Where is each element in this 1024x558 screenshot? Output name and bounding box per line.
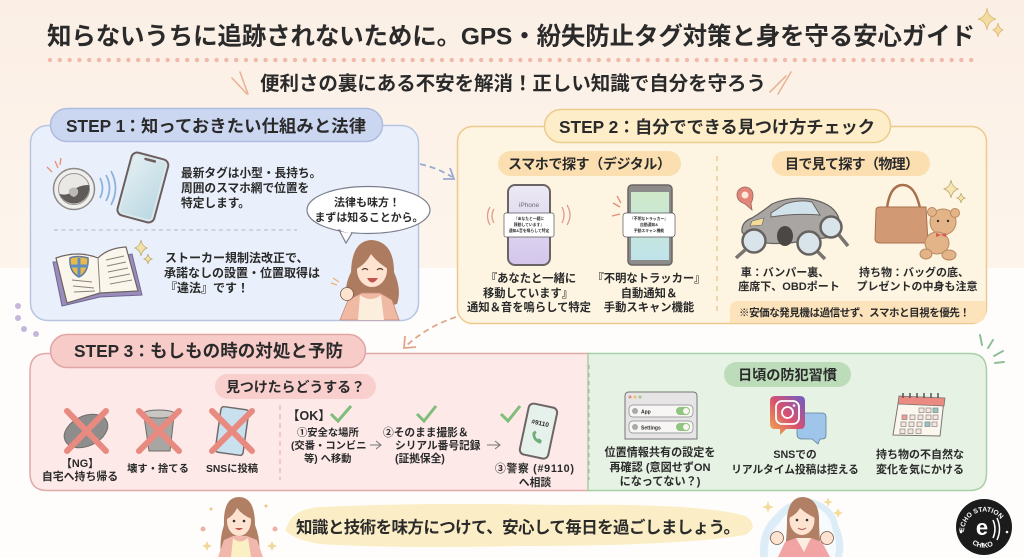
- NG: post on SNS: [206, 406, 258, 475]
- icon: SNS app bubbles: [770, 396, 826, 444]
- police consultation caption: へ相談: [519, 475, 551, 489]
- digital search captions: 通知＆音を鳴らして特定: [467, 300, 591, 314]
- daily habits heading: 日頃の防犯習慣: [738, 367, 837, 384]
- icon: handbag and teddy bear: [875, 185, 960, 260]
- icon: iPhone alert: 通知&音を鳴らして特定: [509, 228, 549, 233]
- arrow: step 1 to step 2: [420, 164, 454, 179]
- NG: post on SNS: SNSに投稿: [206, 462, 258, 475]
- OK steps: シリアル番号記録: [395, 439, 481, 452]
- physical search heading: 目で見て探す（物理）: [785, 156, 919, 172]
- logo: Echo Station Chiko: e: [976, 515, 988, 540]
- law explanation: 承諾なしの設置・位置取得は: [164, 265, 320, 280]
- woman illustration bottom right: [760, 497, 843, 557]
- physical search captions: [738, 265, 978, 293]
- step 2 heading: ：: [618, 117, 635, 137]
- digital search captions: 『あなたと一緒に: [486, 271, 576, 285]
- OK steps: (交番・コンビニ: [291, 439, 367, 452]
- speech bubble: まずは知ることから。: [315, 210, 423, 224]
- woman illustration step 1: [331, 240, 399, 320]
- icon: iPhone alert: [488, 185, 570, 265]
- step 1 heading: [50, 108, 382, 142]
- settings caption: 再確認 (意図せずON: [609, 460, 711, 474]
- title: 知らないうちに追跡されないために。GPS・紛失防止タグ対策と身を守る安心ガイド: [47, 22, 975, 50]
- caution note: [730, 301, 986, 323]
- digital search captions: 手動スキャン機能: [604, 300, 695, 314]
- tracker explanation: 最新タグは小型・長持ち。: [181, 166, 321, 180]
- closing message banner: 知識と技術を味方につけて、安心して毎日を過ごしましょう。: [296, 517, 740, 537]
- digital search captions: 『不明なトラッカー』: [593, 272, 705, 285]
- NG: destroy or discard: [127, 410, 189, 475]
- icon: iPhone alert: 移動しています』: [514, 222, 544, 227]
- OK steps: (証拠保全): [395, 452, 445, 465]
- step 3 heading: ：: [133, 341, 150, 361]
- step 2 heading: [544, 110, 890, 142]
- law explanation: 『違法』です！: [165, 280, 249, 295]
- physical search captions: プレゼントの中身も注意: [856, 279, 978, 293]
- digital search heading: スマホで探す（デジタル）: [508, 156, 671, 172]
- SNS caption: [731, 449, 859, 476]
- tracker explanation: [181, 166, 321, 210]
- logo: Echo Station Chiko: CHIKO: [972, 540, 992, 548]
- OK steps: [287, 406, 520, 465]
- physical search captions: 持ち物：バッグの底、: [859, 265, 969, 279]
- icon: law book: [53, 247, 142, 306]
- belongings caption: 変化を気にかける: [876, 462, 964, 476]
- belongings caption: [876, 447, 964, 476]
- speech bubble: [307, 186, 430, 243]
- icon: settings window: App: [641, 410, 651, 416]
- icon: calendar: [893, 393, 945, 436]
- step 2 heading: STEP 2: [559, 117, 618, 137]
- physical search heading: [772, 151, 930, 176]
- panel: step 2: [458, 110, 986, 324]
- decorative dots left: [15, 303, 39, 337]
- digital search captions: [467, 271, 705, 314]
- logo: Echo Station Chiko: ECHO STATION: [959, 506, 1004, 532]
- digital search captions: 自動通知＆: [621, 286, 677, 300]
- speech bubble: 法律も味方！: [334, 195, 400, 209]
- NG: take home: 【NG】: [61, 457, 99, 470]
- icon: settings window: [625, 392, 697, 439]
- settings caption: 位置情報共有の設定を: [605, 445, 715, 459]
- icon: car with magnifiers: [736, 198, 848, 259]
- icon: phone dialing #9110: #9110: [531, 419, 550, 429]
- icon: iPhone alert: 『あなたと一緒に: [514, 216, 544, 221]
- panel: step 1: [30, 108, 418, 320]
- police consultation caption: [495, 461, 574, 489]
- OK steps: 【OK】: [287, 409, 331, 423]
- digital search heading: [498, 151, 681, 176]
- step 3 heading: STEP 3: [74, 341, 133, 361]
- SNS caption: SNSでの: [773, 449, 817, 461]
- law explanation: [164, 250, 320, 295]
- digital search captions: 移動しています』: [483, 286, 573, 300]
- OK steps: ②そのまま撮影＆: [383, 426, 469, 439]
- SNS caption: リアルタイム投稿は控える: [731, 463, 859, 476]
- step 2 heading: 自分でできる見つけ方チェック: [635, 117, 875, 137]
- NG: take home: 自宅へ持ち帰る: [42, 469, 118, 483]
- police consultation caption: ③警察 (#9110): [495, 461, 574, 475]
- icon: location pin: [737, 187, 753, 210]
- OK steps: ①安全な場所: [297, 426, 359, 439]
- icon: settings window: Settings: [641, 426, 661, 432]
- icon: tracker tag with signal: [47, 158, 116, 210]
- icon: Android tracker alert: [612, 185, 675, 265]
- arrow: step 2 to step 3: [404, 317, 456, 348]
- icon: phone dialing #9110: [519, 403, 558, 460]
- if found heading: [215, 374, 376, 399]
- closing message banner: [285, 504, 753, 547]
- icon: Android tracker alert: 手動スキャン機能: [634, 228, 664, 233]
- step 3 heading: もしもの時の対処と予防: [150, 341, 343, 361]
- NG: destroy or discard: 壊す・捨てる: [127, 462, 189, 475]
- panel: step 3: [30, 334, 986, 490]
- settings caption: [605, 445, 715, 488]
- subtitle: 便利さの裏にある不安を解消！正しい知識で自分を守ろう: [260, 72, 766, 95]
- woman illustration bottom left: [200, 497, 278, 557]
- logo: Echo Station Chiko: [956, 499, 1012, 555]
- physical search captions: 座席下、OBDポート: [738, 279, 840, 293]
- if found heading: 見つけたらどうする？: [226, 379, 365, 395]
- tracker explanation: 周囲のスマホ網で位置を: [181, 181, 309, 195]
- icon: sparkles: [135, 240, 152, 264]
- physical search captions: 車：バンパー裏、: [741, 265, 829, 279]
- icon: sparkles: [944, 180, 965, 203]
- icon: gold sparkles top right: [978, 8, 1003, 37]
- step 3 heading: [50, 334, 366, 368]
- law explanation: ストーカー規制法改正で、: [165, 250, 309, 265]
- tracker explanation: 特定します。: [181, 196, 250, 210]
- icon: Android tracker alert: 自動通知&: [640, 222, 658, 227]
- belongings caption: 持ち物の不自然な: [876, 447, 964, 461]
- caution note: ※安価な発見機は過信せず、スマホと目視を優先！: [739, 306, 970, 319]
- step 1 heading: ：: [124, 116, 141, 136]
- OK steps: 等) へ移動: [304, 452, 351, 465]
- step 1 heading: STEP 1: [66, 116, 126, 136]
- icon: Android tracker alert: 『不明なトラッカー』: [630, 216, 668, 221]
- settings caption: になってない？): [620, 475, 701, 488]
- NG: take home: [42, 408, 118, 483]
- step 1 heading: 知っておきたい仕組みと法律: [141, 116, 366, 136]
- icon: iPhone alert: iPhone: [519, 202, 539, 209]
- icon: smartphone: [116, 151, 170, 224]
- daily habits heading: [724, 362, 851, 387]
